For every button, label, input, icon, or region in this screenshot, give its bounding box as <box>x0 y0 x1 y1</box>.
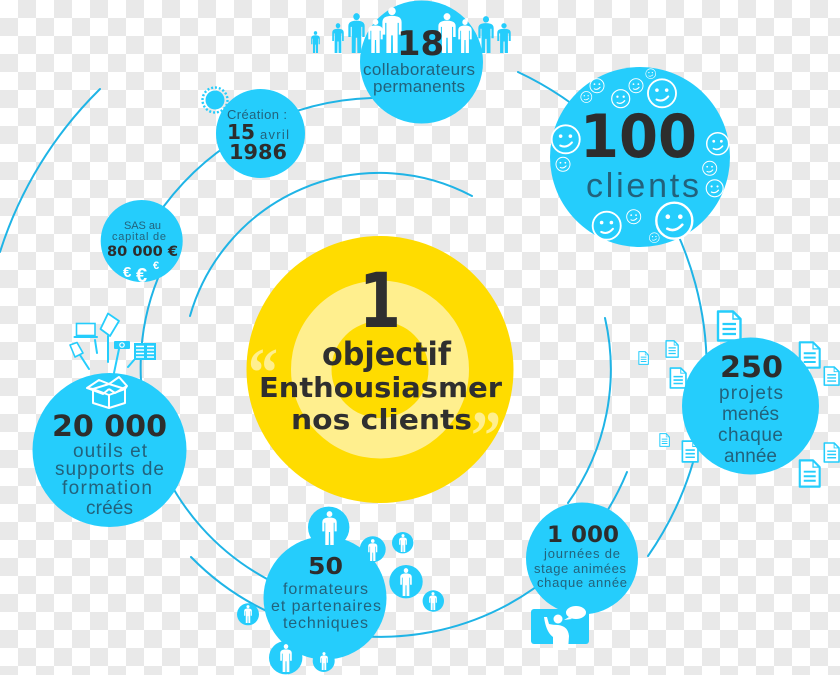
laptop <box>74 324 97 353</box>
panel: creation date <box>216 89 305 178</box>
icon: open box <box>87 377 127 408</box>
panel: 50 formateurs <box>237 507 444 674</box>
document tag <box>100 314 119 362</box>
panel: 20 000 outils: formation <box>62 478 152 499</box>
icon: euro signs: € <box>153 260 159 272</box>
icon: trainer with speech bubble <box>531 606 589 650</box>
panel: 50 formateurs: techniques <box>283 615 368 632</box>
year: 1986 <box>229 140 287 164</box>
central target: 1 objectif: nos clients <box>291 403 472 436</box>
number: 250 <box>720 350 783 384</box>
panel: 1 000 journees: chaque année <box>537 575 627 590</box>
panel: 1 000 journees <box>526 502 638 650</box>
concentric connecting arcs <box>0 72 707 637</box>
icon: white figures <box>244 511 437 672</box>
panel: 20 000 outils: supports de <box>55 459 164 480</box>
number: 100 <box>580 102 697 172</box>
icon: people bubbles <box>237 507 444 674</box>
day: 15 <box>227 120 255 144</box>
label: projets <box>719 383 783 404</box>
panel: 18 collaborateurs: permanents <box>373 77 465 96</box>
closing quote: ” <box>471 398 501 475</box>
panel: 250 projets: année <box>724 446 777 467</box>
label: formateurs <box>283 581 368 598</box>
label: outils et <box>73 441 148 462</box>
icon: sun <box>202 88 228 112</box>
panel: 100 clients <box>550 67 730 247</box>
icon: training tools above box <box>70 314 156 373</box>
objective text: objectif <box>322 335 452 373</box>
panel: 18 collaborateurs <box>311 0 511 124</box>
amount: 80 000 € <box>107 244 178 260</box>
icon: euro signs: € <box>123 264 132 281</box>
panel: 20 000 outils <box>32 373 186 527</box>
icon: smileys <box>552 69 729 243</box>
headline number: 1 <box>359 256 401 345</box>
panel: 1 000 journees: stage animées <box>534 561 626 576</box>
number: 50 <box>308 552 343 580</box>
panel: 250 projets <box>682 338 819 474</box>
label: collaborateurs <box>363 60 475 79</box>
panel: SAS capital: capital de <box>112 231 166 243</box>
small tag <box>70 342 89 369</box>
icon: euro signs <box>123 260 159 287</box>
panel: 250 projets: menés <box>722 404 779 425</box>
icon: euro signs: € <box>136 265 147 287</box>
camera <box>114 341 130 373</box>
label: clients <box>586 167 699 205</box>
number: 20 000 <box>52 409 167 443</box>
central target: 1 objectif <box>246 236 514 503</box>
month: avril <box>260 127 289 142</box>
panel: 20 000 outils: créés <box>86 498 133 519</box>
icon: row of people <box>311 7 511 53</box>
panel: 250 projets: chaque <box>718 425 783 446</box>
number: 18 <box>397 24 444 64</box>
label: Création : <box>227 107 287 122</box>
icon: scattered documents <box>639 312 839 487</box>
central target: 1 objectif: Enthousiasmer <box>259 371 502 404</box>
number: 1 000 <box>547 523 619 548</box>
label: journées de <box>543 546 620 561</box>
opening quote: “ <box>248 335 278 412</box>
label: SAS au <box>124 220 161 232</box>
panel: 50 formateurs: et partenaires <box>271 598 381 615</box>
open book <box>128 343 156 367</box>
panel: SAS capital <box>101 200 183 287</box>
